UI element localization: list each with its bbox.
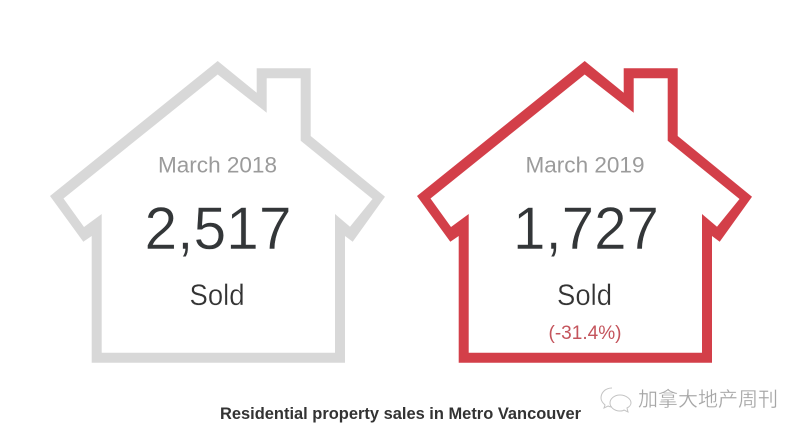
date label: March 2018 [158, 152, 277, 178]
icon: grey house outline [50, 61, 385, 363]
watermark [601, 387, 778, 412]
caption: Residential property sales in Metro Vancouver [220, 405, 582, 423]
icon: red house outline [417, 61, 752, 363]
panel: March 2019 [417, 61, 752, 363]
panel: March 2018 [50, 61, 385, 363]
account name: 加拿大地产周刊 [638, 387, 778, 411]
icon: chat bubbles [601, 388, 631, 412]
sold count: 2,517 [144, 195, 292, 262]
sold count: 1,727 [513, 195, 659, 262]
sold label: Sold [190, 279, 244, 312]
sold label: Sold [557, 279, 612, 312]
percent change: (-31.4%) [548, 323, 622, 344]
date label: March 2019 [526, 152, 644, 178]
